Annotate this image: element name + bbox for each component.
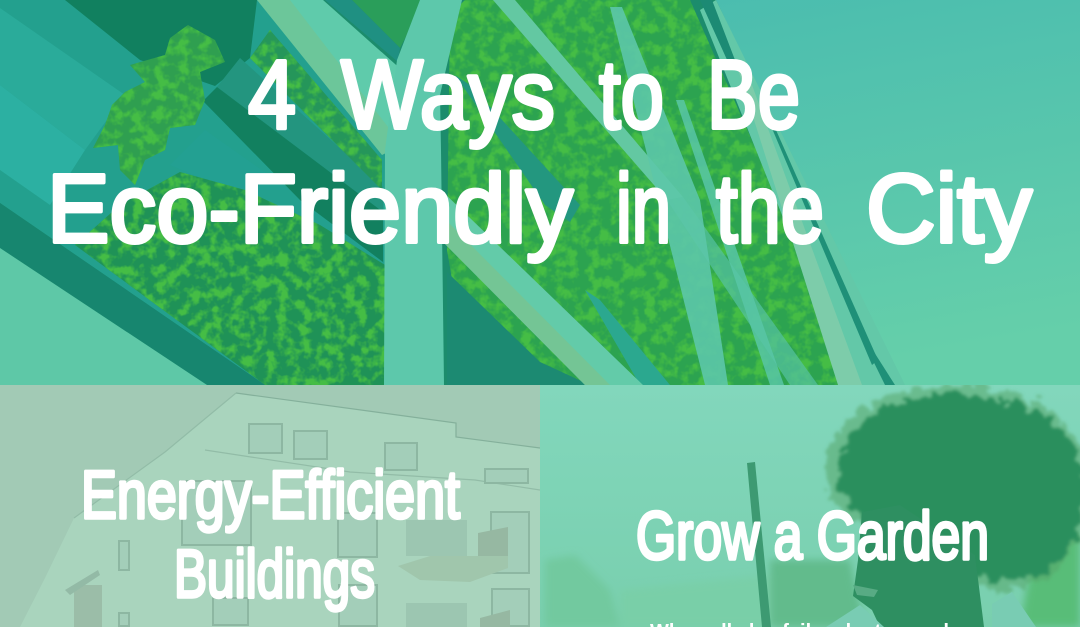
background plants	[545, 530, 1080, 627]
teal and dark beams of the facade	[217, 58, 383, 212]
central pillar and beams	[257, 0, 402, 155]
title: Be	[707, 40, 800, 149]
foliage: upper planter	[250, 30, 382, 190]
woman's shirt	[826, 592, 1036, 627]
teal planters on right wall	[455, 75, 580, 222]
dark lower beam and pale lower-left wall	[0, 203, 265, 385]
title: the	[716, 154, 824, 263]
panel: grow a garden	[540, 385, 1080, 627]
title: Eco-Friendly	[47, 154, 573, 263]
hatched edge strip	[700, 0, 905, 385]
title: Ways	[341, 40, 555, 149]
grass at top	[352, 0, 425, 48]
woman's hair	[825, 385, 1080, 590]
title	[47, 40, 1032, 263]
garden pole	[747, 462, 771, 627]
heading: energy-efficient buildings	[81, 457, 460, 612]
building facade base	[0, 0, 754, 385]
foliage: right wall greenery	[447, 0, 860, 385]
foliage: lower bush	[75, 172, 384, 385]
panel: hero photo of green building	[0, 0, 1080, 385]
panel: energy-efficient buildings	[0, 385, 540, 627]
title: in	[616, 154, 671, 263]
title: City	[866, 154, 1032, 263]
left tree	[93, 25, 225, 185]
woman's lips	[853, 585, 878, 597]
heading: energy-efficient buildings: Buildings	[174, 536, 375, 612]
woman's face and neck	[853, 505, 984, 627]
teal left facade	[0, 0, 390, 385]
title: to	[599, 40, 664, 149]
title: 4	[248, 40, 296, 149]
heading: energy-efficient buildings: Energy-Efficient	[81, 457, 460, 533]
apartment building illustration	[20, 393, 540, 627]
